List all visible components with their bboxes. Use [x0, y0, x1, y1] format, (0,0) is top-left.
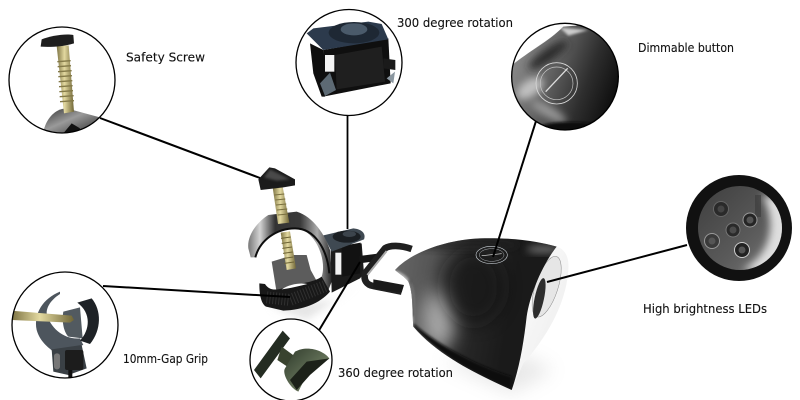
- loop connector: [365, 246, 412, 292]
- button detail: [512, 26, 618, 130]
- screw cap: [258, 167, 295, 190]
- lower screw: [281, 231, 296, 270]
- lens ring: [526, 253, 567, 320]
- label: 10mm gap grip: 10mm-Gap Grip: [123, 351, 208, 366]
- label: dimmable button: Dimmable button: [638, 40, 734, 55]
- lower jaw: [259, 277, 330, 311]
- lower arm: [373, 279, 404, 293]
- label: 300 degree rotation: 300 degree rotation: [397, 15, 513, 30]
- screw detail: [41, 34, 100, 137]
- leader line: dimmable button: [493, 121, 536, 257]
- hinge detail: [254, 331, 329, 392]
- leader line: 300 degree rotation: [346, 115, 348, 229]
- upper screw: [273, 187, 289, 224]
- clamp: [248, 167, 380, 320]
- leader line: grip: [103, 286, 290, 297]
- LED 2: [743, 213, 757, 227]
- callout: safety screw: [9, 27, 115, 137]
- grip detail: [12, 292, 99, 380]
- label: 360 degree rotation: 360 degree rotation: [338, 365, 453, 380]
- lamp body: [395, 238, 556, 390]
- reflector crescent: [741, 192, 782, 270]
- label: high brightness LEDs: High brightness LEDs: [643, 301, 767, 316]
- LED 4: [704, 234, 720, 248]
- product: clamp and lamp assembly: [248, 167, 570, 397]
- rotation joint: [331, 243, 364, 293]
- callout: high brightness LEDs: [686, 175, 792, 281]
- callout: 300 degree rotation: [296, 10, 402, 116]
- label: safety screw: Safety Screw: [126, 50, 205, 64]
- callout: 10mm gap grip: [12, 272, 118, 380]
- callout: 360 degree rotation: [250, 319, 332, 400]
- callout: dimmable button: [511, 22, 619, 131]
- swivel arm: [359, 253, 380, 263]
- nut plate: [272, 255, 322, 293]
- LED 1: [714, 202, 728, 216]
- leader line: LEDs: [547, 245, 687, 282]
- clamp shadow: [270, 283, 360, 320]
- joint detail: [307, 22, 395, 97]
- leader line: 360 degree rotation: [318, 262, 360, 332]
- lamp shadow: [440, 357, 553, 393]
- LED 3: [726, 223, 740, 237]
- lamp front shell: [512, 247, 568, 390]
- LED 5: [734, 242, 750, 258]
- lamp: [373, 230, 570, 397]
- button outline: [476, 246, 507, 264]
- leader line: safety screw: [100, 118, 260, 178]
- upper clamp arc: [248, 212, 332, 293]
